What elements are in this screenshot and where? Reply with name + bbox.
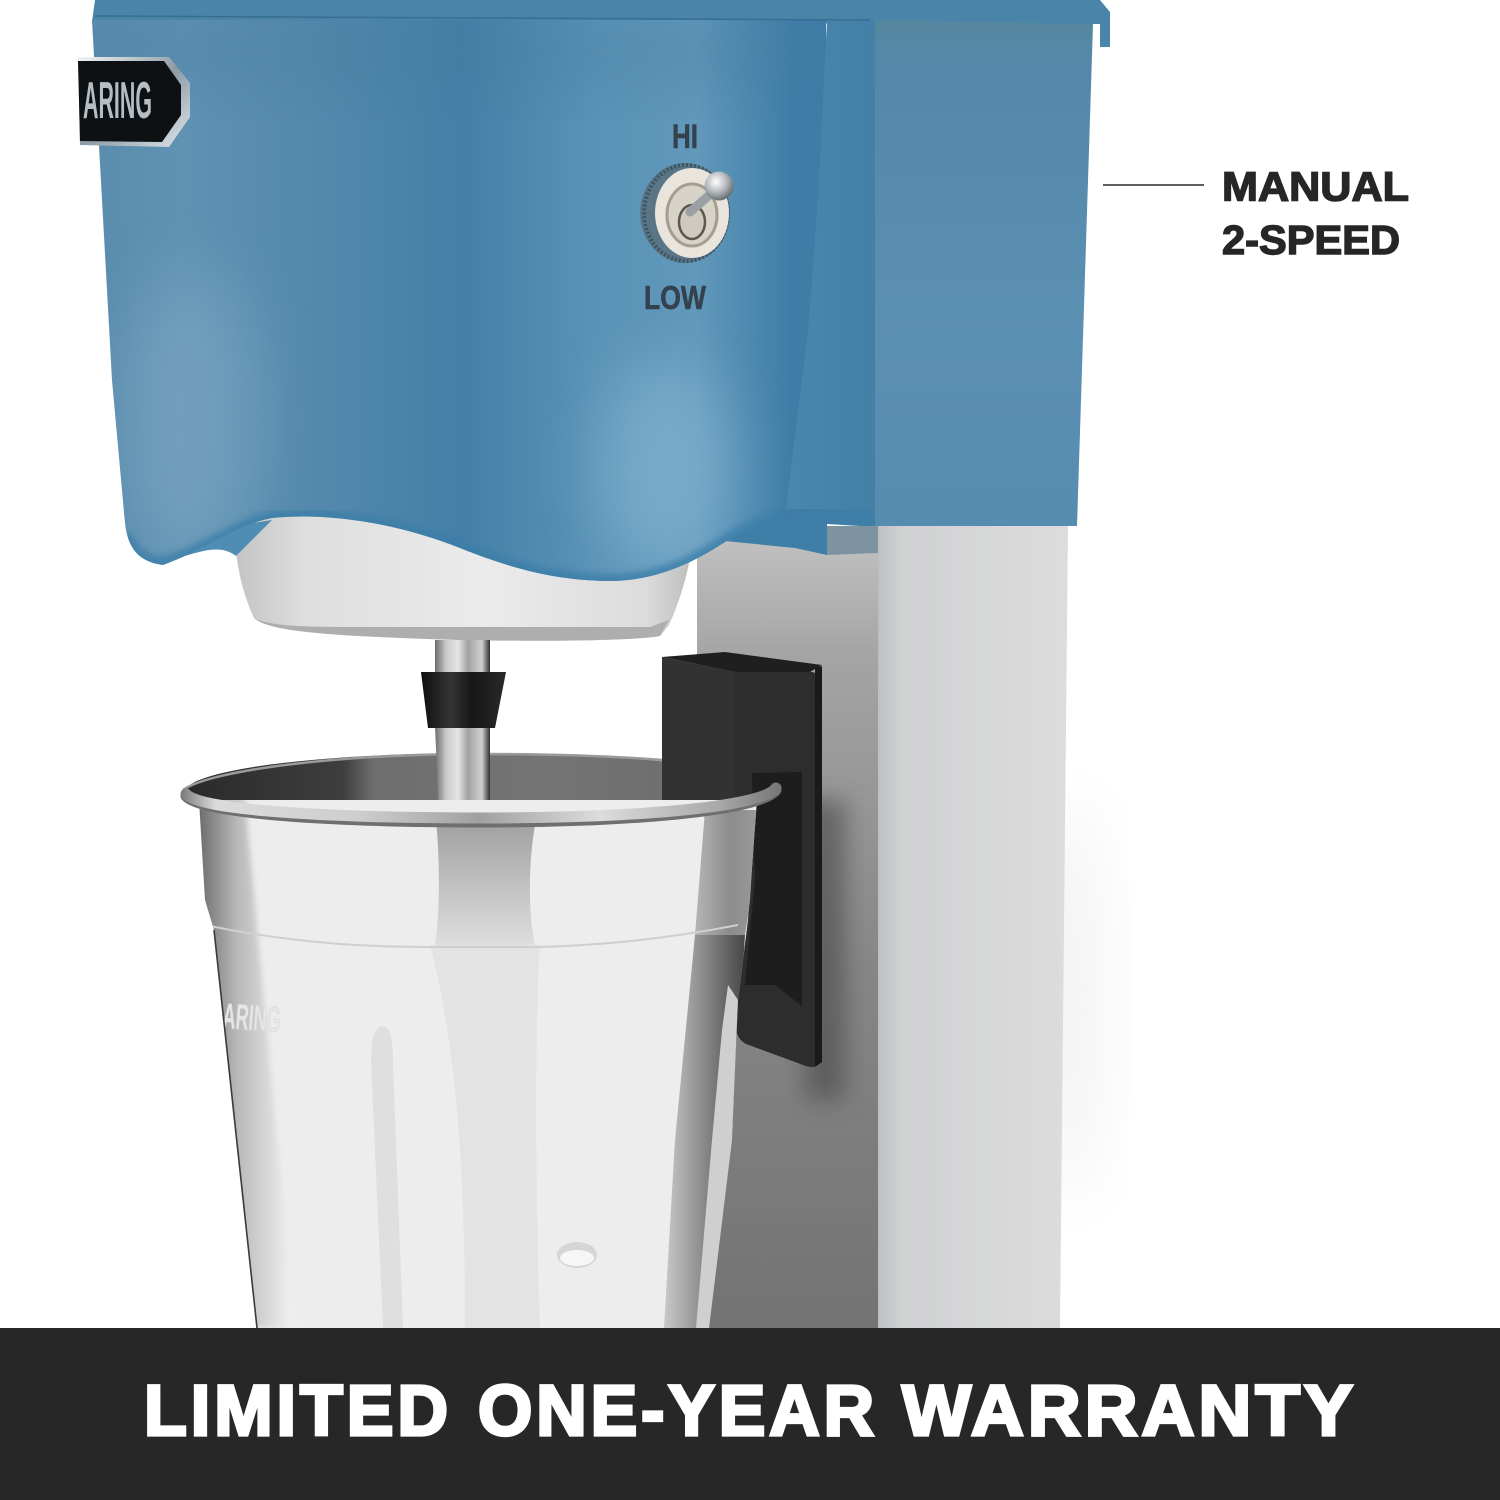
pillar side face (697, 530, 878, 1328)
housing side flap (786, 20, 875, 509)
bracket recess (745, 772, 802, 1006)
cup base metal (190, 800, 770, 1330)
seam under the lid (95, 16, 870, 20)
cup dimple (557, 1242, 597, 1268)
speed label: LOW: LOW (644, 279, 707, 316)
pillar soft shadow (1040, 800, 1100, 1200)
footer heading: ONE-YEAR (478, 1372, 878, 1451)
cup interior (183, 753, 775, 831)
cup lower center panel (430, 945, 540, 1328)
cup groove (371, 1026, 403, 1328)
bowl bottom band (254, 618, 669, 641)
panel: blue motor housing (90, 0, 1110, 581)
cup band line (205, 925, 738, 947)
panel: stainless steel pillar (697, 525, 1068, 1328)
stainless steel cup (186, 788, 776, 1330)
cup lower right strip (664, 935, 745, 1328)
brand badge (78, 57, 190, 147)
housing lower block (725, 505, 878, 555)
bracket top face (662, 652, 822, 672)
bracket front plate (735, 672, 816, 1067)
housing right block (872, 20, 1093, 526)
cup back rim (183, 754, 662, 790)
footer heading (144, 1372, 1357, 1451)
silver mixer bowl (236, 500, 692, 641)
cup left edge line (214, 930, 257, 1328)
speed label: HI: HI (672, 118, 698, 156)
housing under lip left (185, 520, 272, 556)
footer bar (0, 1328, 1500, 1500)
callout: manual 2-speed: MANUAL (1222, 164, 1409, 210)
pillar front face (878, 525, 1068, 1328)
footer heading: WARRANTY (902, 1372, 1357, 1451)
cup top right strip (695, 810, 756, 935)
cup left shading (200, 800, 281, 1328)
bracket side block (662, 657, 735, 850)
bracket right edge (815, 666, 822, 1067)
footer heading: LIMITED (144, 1372, 452, 1451)
housing front shell (90, 15, 830, 581)
cup center panel (435, 820, 536, 945)
cup reflection strip (696, 985, 738, 1328)
cup embossed wordmark: ARING (221, 995, 282, 1040)
callout line (1103, 184, 1204, 186)
callout: manual 2-speed (1222, 164, 1409, 263)
callout: manual 2-speed: 2-SPEED (1222, 217, 1400, 263)
bracket cast shadow (805, 800, 845, 1100)
housing lid (92, 0, 1110, 47)
cup rim (186, 788, 776, 822)
icon: toggle switch (640, 163, 734, 263)
mixer shaft upper (435, 640, 490, 676)
rubber shaft collar (421, 672, 506, 728)
brand badge: ARING (83, 72, 152, 130)
mixer shaft lower (435, 726, 490, 815)
black cup holder bracket (662, 652, 822, 1067)
